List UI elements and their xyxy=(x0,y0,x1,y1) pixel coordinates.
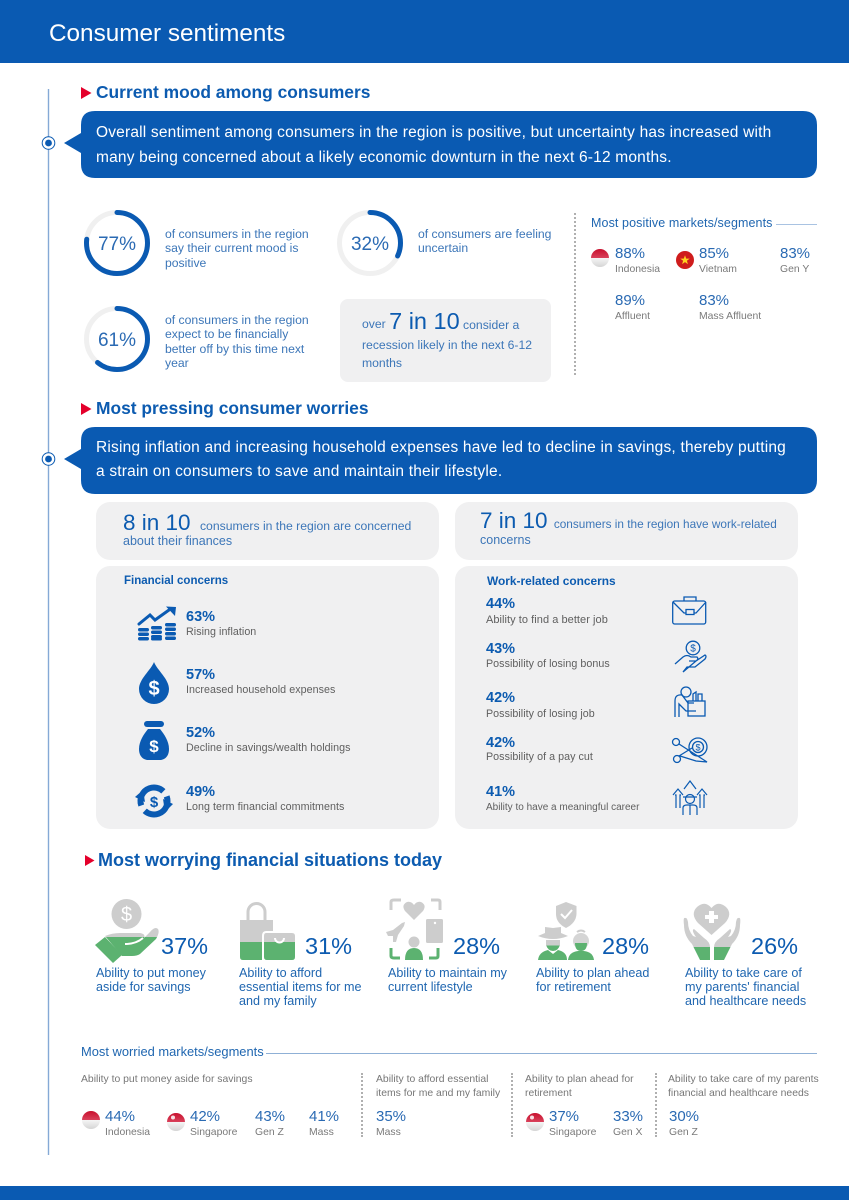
stat: Gen X xyxy=(613,1108,643,1139)
text: 77% description: positive xyxy=(165,256,206,270)
donut 32% xyxy=(337,210,403,276)
stat: 31%: 31% xyxy=(305,933,352,959)
stat: Singapore: Singapore xyxy=(190,1126,237,1138)
stat: meaningful career: Ability to have a meaningful career xyxy=(486,802,639,813)
title: Consumer sentiments xyxy=(49,20,285,47)
stat: household expenses xyxy=(186,667,335,696)
label: essentials: essential items for me xyxy=(239,980,361,994)
header band xyxy=(0,0,849,63)
callout: rising inflation: a strain on consumers to save and maintain their lifestyle. xyxy=(96,463,502,480)
footer band xyxy=(0,1186,849,1200)
stat: household expenses: 57% xyxy=(186,667,215,683)
stat: savings decline: Decline in savings/wealth holdings xyxy=(186,742,350,754)
text: parents segment heading: financial and healthcare needs xyxy=(668,1088,809,1099)
stat: savings decline: 52% xyxy=(186,725,215,741)
icon: Indonesia flag xyxy=(591,249,609,267)
label: retirement: Ability to plan ahead xyxy=(536,966,649,980)
text: 77% description: say their current mood is xyxy=(165,241,298,255)
callout: overall sentiment: Overall sentiment among consumers in the region is positive, but uncertainty has increased with xyxy=(96,124,771,141)
callout: overall sentiment xyxy=(64,111,817,178)
icon: Vietnam flag xyxy=(676,251,694,269)
icon: lifestyle xyxy=(385,897,445,961)
stat: rising inflation: Rising inflation xyxy=(186,626,256,638)
stat: Mass xyxy=(309,1108,339,1139)
icon: money bag xyxy=(139,721,169,760)
panel: recession xyxy=(340,299,551,382)
label: parents: my parents' financial xyxy=(685,980,799,994)
label: essentials: and my family xyxy=(239,994,317,1008)
stat: Mass: Mass xyxy=(309,1126,334,1138)
text: 77% description: of consumers in the region xyxy=(165,227,309,241)
stat: meaningful career xyxy=(486,784,640,813)
stat: Indonesia: Indonesia xyxy=(615,264,660,274)
label: savings xyxy=(96,966,206,994)
stat: Gen X: Gen X xyxy=(613,1126,642,1138)
text: parents segment heading xyxy=(668,1073,819,1100)
section heading: current mood: Current mood among consumers xyxy=(96,82,370,102)
label: savings: aside for savings xyxy=(96,980,191,994)
heading: most worried markets: Most worried markets/segments xyxy=(81,1044,264,1059)
icon: money bag: $ xyxy=(149,737,159,756)
panel: financial concerns xyxy=(96,566,439,829)
panel: 8 in 10 xyxy=(96,502,439,560)
icon: water drop dollar xyxy=(139,662,169,704)
icon: Singapore flag xyxy=(526,1113,544,1131)
stat: better job: 44% xyxy=(486,596,515,612)
stat: Gen Y: Gen Y xyxy=(780,264,809,274)
text: essentials segment heading: Ability to afford essential xyxy=(376,1074,488,1085)
label: parents xyxy=(685,966,806,1009)
icon: hand with coin: $ xyxy=(121,904,132,926)
stat: pay cut: 42% xyxy=(486,735,515,751)
stat: Mass: 41% xyxy=(309,1108,339,1125)
stat: savings decline xyxy=(186,725,350,754)
section heading: pressing worries: Most pressing consumer worries xyxy=(96,398,369,418)
stat: rising inflation: 63% xyxy=(186,609,215,625)
donut 77%: 77% xyxy=(98,234,136,255)
stat: Mass Affluent: Mass Affluent xyxy=(699,310,761,322)
stat: Singapore xyxy=(190,1108,238,1139)
label: parents: and healthcare needs xyxy=(685,994,806,1008)
stat: Affluent: Affluent xyxy=(615,310,650,322)
label: lifestyle: Ability to maintain my xyxy=(388,966,507,980)
panel: 7 in 10: concerns xyxy=(480,533,531,547)
callout: rising inflation: Rising inflation and increasing household expenses have led to decline in savings, thereby putting xyxy=(96,439,786,456)
stat: Mass essentials: Mass xyxy=(376,1126,401,1138)
text: 77% description xyxy=(165,227,309,270)
panel: 8 in 10: 8 in 10 consumers in the region are concerned xyxy=(123,510,411,535)
section heading: worrying situations: Most worrying financial situations today xyxy=(98,850,442,870)
stat: losing job: Possibility of losing job xyxy=(486,708,595,720)
divider: positive markets xyxy=(574,213,576,375)
stat: Vietnam: 85% xyxy=(699,245,729,262)
stat: Mass Affluent: 83% xyxy=(699,292,729,309)
icon: person with arrows xyxy=(672,780,708,815)
label: savings: Ability to put money xyxy=(96,966,206,980)
stat: Singapore retirement: 37% xyxy=(549,1108,579,1125)
stat: losing job: 42% xyxy=(486,690,515,706)
text: 32% description: of consumers are feeling xyxy=(418,227,551,241)
icon: water drop dollar: $ xyxy=(148,678,160,700)
donut 77% xyxy=(84,210,150,276)
stat: pay cut xyxy=(486,735,593,763)
stat: Affluent xyxy=(615,292,650,322)
text: essentials segment heading: items for me and my family xyxy=(376,1088,500,1099)
icon: red marker xyxy=(85,855,95,866)
donut 32%: 32% xyxy=(351,234,389,255)
stat: Gen Z parents: 30% xyxy=(669,1108,699,1125)
stat: meaningful career: 41% xyxy=(486,784,515,800)
stat: 28% lifestyle: 28% xyxy=(453,933,500,959)
stat: losing bonus xyxy=(486,641,610,670)
stat: Singapore: 42% xyxy=(190,1108,220,1125)
icon: person with box xyxy=(674,686,706,717)
text: 61% description: expect to be financially xyxy=(165,327,288,341)
stat: better job: Ability to find a better job xyxy=(486,614,608,626)
stat: Gen Z xyxy=(255,1108,285,1139)
stat: commitments: Long term financial commitments xyxy=(186,801,344,813)
stat: pay cut: Possibility of a pay cut xyxy=(486,751,593,763)
text: 61% description: year xyxy=(165,356,189,370)
panel: recession: months xyxy=(362,356,402,370)
callout: rising inflation xyxy=(64,427,817,494)
panel: 7 in 10 xyxy=(455,502,798,560)
stat: Gen Z parents xyxy=(669,1108,699,1139)
icon: hand with coin xyxy=(94,895,160,965)
text: retirement segment heading: retirement xyxy=(525,1088,572,1099)
panel: 7 in 10: 7 in 10 consumers in the region have work-related xyxy=(480,508,777,533)
stat: rising inflation xyxy=(186,609,256,638)
icon: hand with coin: $ xyxy=(690,644,696,654)
label: essentials xyxy=(239,966,361,1009)
callout: overall sentiment: many being concerned about a likely economic downturn in the next 6-12 months. xyxy=(96,149,672,166)
stat: Affluent: 89% xyxy=(615,292,645,309)
stat: commitments xyxy=(186,784,344,813)
icon: Indonesia flag xyxy=(82,1111,100,1129)
icon: shopping bags xyxy=(238,900,298,962)
stat: commitments: 49% xyxy=(186,784,215,800)
stat: Indonesia: 44% xyxy=(105,1108,135,1125)
label: lifestyle xyxy=(388,966,507,994)
stat: 26%: 26% xyxy=(751,933,798,959)
stat: Gen Z: 43% xyxy=(255,1108,285,1125)
stat: Gen Z parents: Gen Z xyxy=(669,1126,698,1138)
stat: Indonesia: Indonesia xyxy=(105,1126,150,1138)
stat: Vietnam xyxy=(699,245,737,274)
text: 61% description: of consumers in the region xyxy=(165,313,309,327)
icon: scissors cutting coin xyxy=(672,737,708,764)
stat: losing bonus: 43% xyxy=(486,641,515,657)
icon: circular arrows dollar: $ xyxy=(150,794,159,811)
stat: Vietnam: Vietnam xyxy=(699,264,737,274)
timeline xyxy=(42,89,56,1155)
text: 32% description xyxy=(418,227,551,255)
text: savings segment heading: Ability to put money aside for savings xyxy=(81,1074,253,1085)
label: essentials: Ability to afford xyxy=(239,966,322,980)
panel: work-related concerns xyxy=(455,566,798,829)
stat: Gen X: 33% xyxy=(613,1108,643,1125)
label: lifestyle: current lifestyle xyxy=(388,980,473,994)
label: retirement: for retirement xyxy=(536,980,611,994)
label: parents: Ability to take care of xyxy=(685,966,802,980)
text: 61% description xyxy=(165,313,309,370)
stat: losing job xyxy=(486,690,595,720)
icon: circular arrows dollar xyxy=(135,784,173,818)
stat: Indonesia: 88% xyxy=(615,245,645,262)
donut 61%: 61% xyxy=(98,330,136,351)
stat: Indonesia xyxy=(105,1108,151,1139)
icon: scissors cutting coin: $ xyxy=(695,742,701,752)
stat: Gen Y xyxy=(780,245,810,274)
stat: household expenses: Increased household expenses xyxy=(186,684,335,696)
stat: 37%: 37% xyxy=(161,933,208,959)
text: 32% description: uncertain xyxy=(418,241,468,255)
icon: red marker xyxy=(81,403,92,415)
stat: Singapore retirement xyxy=(549,1108,597,1139)
panel: recession: over 7 in 10 consider a xyxy=(362,308,519,334)
icon: briefcase xyxy=(672,596,706,625)
text: 61% description: better off by this time next xyxy=(165,342,304,356)
stat: losing bonus: Possibility of losing bonus xyxy=(486,658,610,670)
icon: retirement couple xyxy=(538,900,598,962)
text: retirement segment heading xyxy=(525,1073,634,1100)
stat: Mass essentials xyxy=(376,1108,406,1139)
label: retirement xyxy=(536,966,649,994)
stat: Mass essentials: 35% xyxy=(376,1108,406,1125)
stat: Indonesia xyxy=(615,245,660,274)
heading: work-related concerns: Work-related concerns xyxy=(487,574,616,588)
donut 61% xyxy=(84,306,150,372)
icon: coins and arrow xyxy=(137,606,176,640)
heading: financial concerns: Financial concerns xyxy=(124,575,228,587)
stat: better job xyxy=(486,596,608,626)
stat: Gen Z: Gen Z xyxy=(255,1126,284,1138)
icon: Singapore flag xyxy=(167,1113,185,1131)
text: parents segment heading: Ability to take care of my parents xyxy=(668,1074,819,1085)
icon: hand with coin xyxy=(674,640,707,672)
icon: red marker xyxy=(81,87,92,99)
stat: 28% retirement: 28% xyxy=(602,933,649,959)
icon: hands and heart xyxy=(683,900,743,962)
panel: 8 in 10: about their finances xyxy=(123,534,232,548)
stat: Singapore retirement: Singapore xyxy=(549,1126,596,1138)
panel: recession: recession likely in the next 6-12 xyxy=(362,338,532,352)
text: retirement segment heading: Ability to plan ahead for xyxy=(525,1074,634,1085)
stat: Mass Affluent xyxy=(699,292,762,322)
text: essentials segment heading xyxy=(376,1073,500,1100)
heading: most positive markets: Most positive markets/segments xyxy=(591,216,773,230)
stat: Gen Y: 83% xyxy=(780,245,810,262)
